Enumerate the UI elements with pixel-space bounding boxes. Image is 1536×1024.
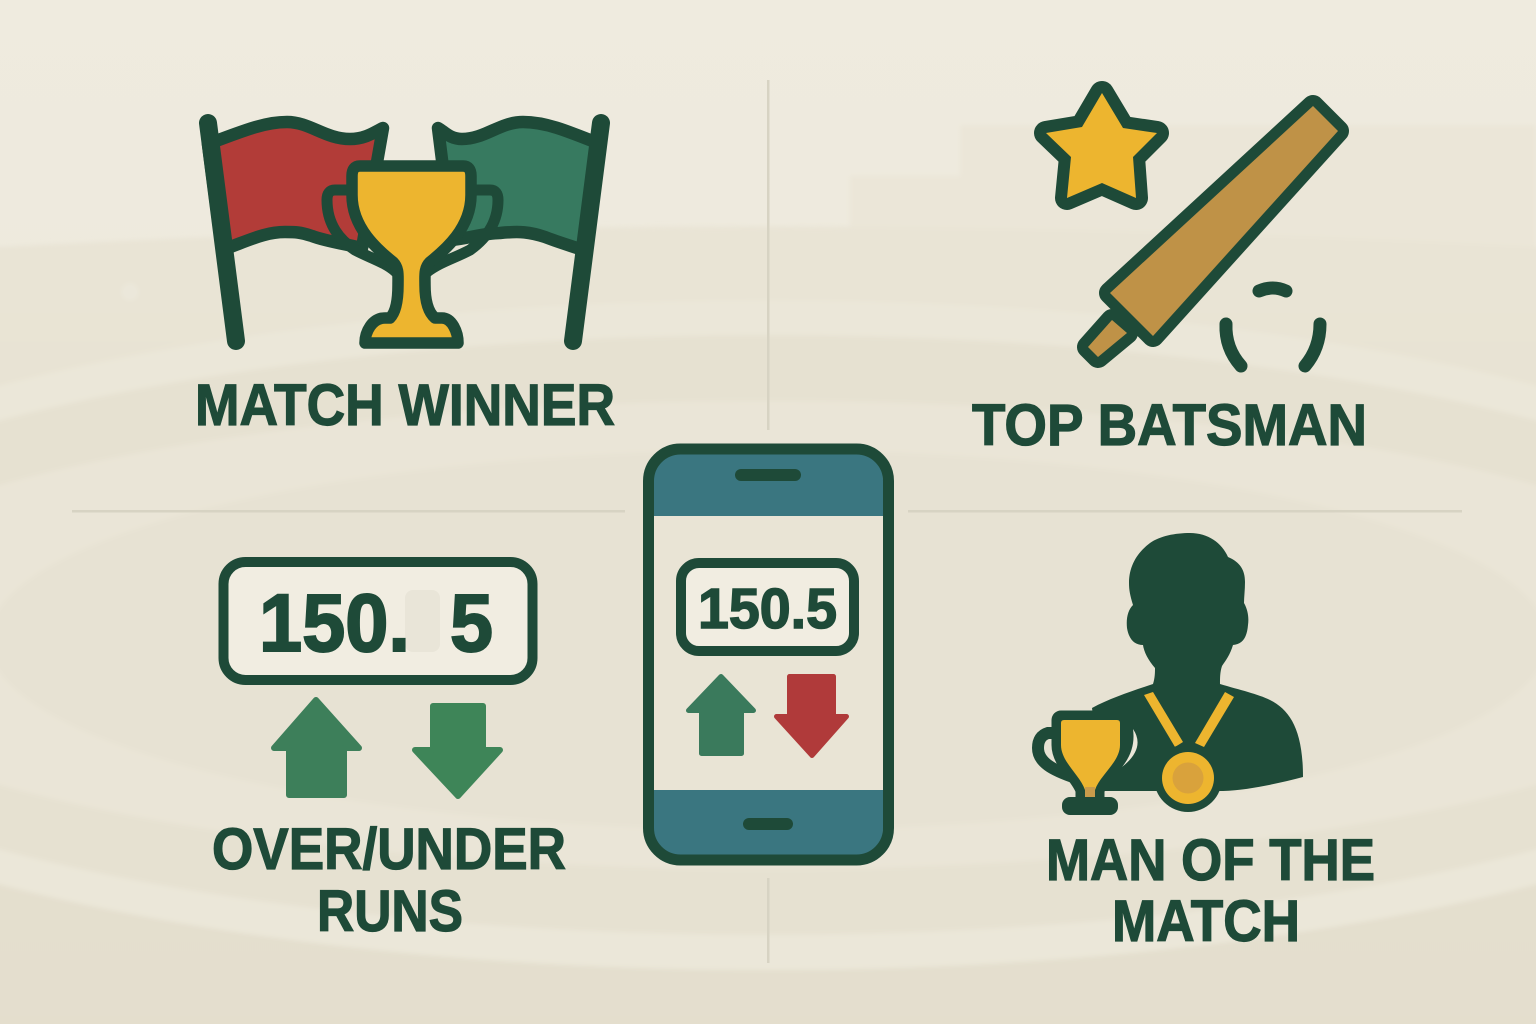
icon: trophy [327, 166, 498, 343]
phone bottom bar [653, 790, 883, 855]
icon: red flag [208, 122, 383, 250]
icon: small trophy [1038, 720, 1138, 815]
icon: star [1046, 93, 1157, 198]
heading: top batsman: TOP BATSMAN [972, 393, 1367, 458]
panel: phone [648, 449, 888, 860]
icon: green flag [438, 122, 600, 251]
phone score value: 150.5 [698, 577, 837, 641]
icon: up arrow [274, 700, 359, 795]
heading: over/under runs: OVER/UNDER [212, 817, 566, 882]
score value: 150. [259, 578, 410, 669]
phone down arrow [776, 676, 846, 756]
panel: top batsman [972, 93, 1367, 458]
icon: right pole [573, 123, 601, 341]
phone top bar [653, 454, 883, 516]
panel: match winner [195, 122, 615, 438]
heading: match winner: MATCH WINNER [195, 373, 615, 438]
icon: medal ribbon [1144, 692, 1234, 747]
phone bottom button [743, 818, 793, 830]
icon: cricket bat [1088, 106, 1338, 357]
heading: man of the match: MAN OF THE [1046, 828, 1375, 893]
score box smudge [405, 590, 440, 652]
panel: over/under runs [212, 562, 566, 944]
phone body [648, 449, 888, 860]
phone top speaker [735, 469, 801, 481]
heading line two: RUNS [317, 879, 463, 944]
heading line two: MATCH [1112, 889, 1300, 954]
icon: down arrow [415, 706, 500, 796]
icon: medal [1154, 744, 1222, 812]
icon: player silhouette [1092, 533, 1303, 791]
phone up arrow [688, 676, 754, 754]
phone outline [648, 449, 888, 860]
icon: left pole [208, 123, 236, 341]
phone score box [681, 563, 854, 651]
panel: man of the match [1038, 533, 1375, 954]
score box [224, 562, 532, 680]
score value last digit: 5 [450, 578, 493, 669]
icon: ball motion arcs [1226, 288, 1320, 366]
